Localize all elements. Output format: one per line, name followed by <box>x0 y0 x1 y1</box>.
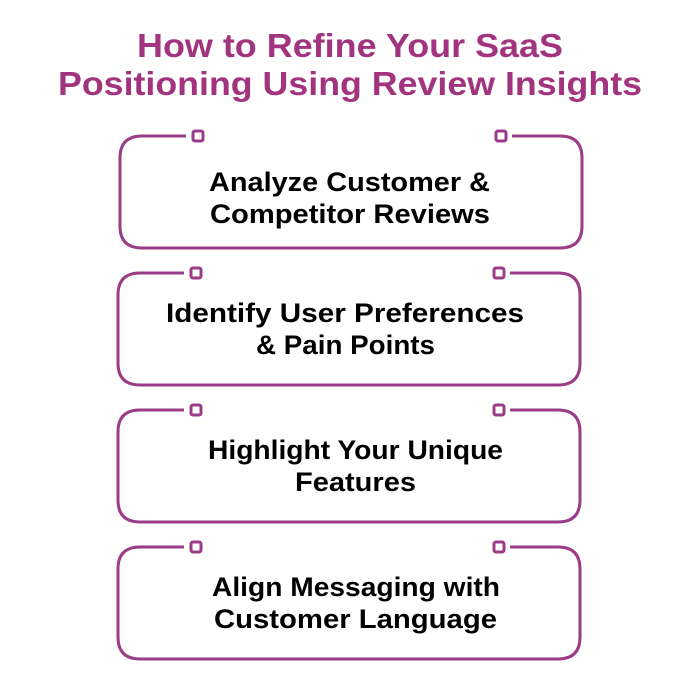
panel: step 2: & Pain Points <box>256 330 435 360</box>
panel: step 4: Align Messaging with <box>212 572 500 602</box>
panel: step 2: Identify User Preferences <box>166 298 524 328</box>
panel: step 3 <box>118 405 580 522</box>
panel: step 1 <box>120 131 582 248</box>
panel: step 1: Analyze Customer & <box>209 167 490 197</box>
panel: step 4 <box>118 542 580 659</box>
panel: step 3: Highlight Your Unique <box>208 435 503 465</box>
title: Positioning Using Review Insights <box>58 65 642 102</box>
title <box>58 27 642 102</box>
panel: step 3: Features <box>295 467 416 497</box>
title: How to Refine Your SaaS <box>137 27 563 64</box>
panel: step 4: Customer Language <box>214 604 497 634</box>
panel: step 1: Competitor Reviews <box>210 199 490 229</box>
panel: step 2 <box>118 268 580 385</box>
